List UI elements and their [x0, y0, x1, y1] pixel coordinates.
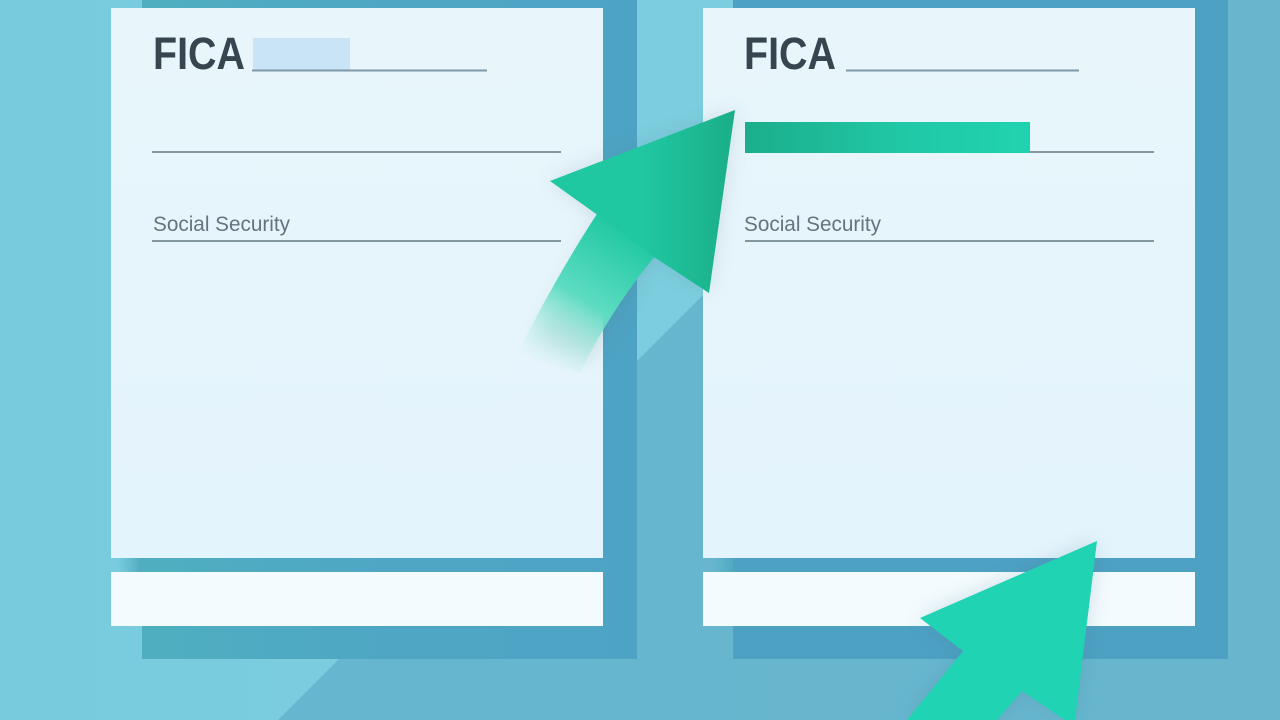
right heading: FICA: [744, 28, 836, 79]
left blank field rule: [152, 151, 561, 153]
right gap shade between sheet and footer: [712, 558, 733, 572]
left gap shade between sheet and footer: [118, 558, 142, 572]
right blank field rule: [745, 151, 1154, 153]
right form footer bar: [703, 572, 1195, 626]
left form footer bar: [111, 572, 603, 626]
arrow: upper green arrow: [518, 110, 735, 373]
upper arrow head: [550, 110, 735, 293]
left social security rule: [152, 240, 561, 242]
left form drop shadow: [142, 0, 637, 659]
left highlight box: [253, 38, 350, 70]
right form sheet: [703, 8, 1195, 558]
right social security label: Social Security: [744, 213, 881, 236]
panel: right form: [703, 0, 1228, 659]
left heading: FICA: [153, 28, 245, 79]
panel: left form: [111, 0, 637, 659]
right social security rule: [745, 240, 1154, 242]
left form sheet: [111, 8, 603, 558]
green filled bar: [745, 122, 1030, 153]
left social security label: Social Security: [153, 213, 290, 236]
left heading rule: [252, 70, 487, 72]
arrow: lower green arrow: [907, 541, 1097, 720]
lower arrow shape: [907, 541, 1097, 720]
right heading rule: [846, 70, 1079, 72]
upper arrow tail: [518, 214, 656, 373]
right form drop shadow: [733, 0, 1228, 659]
